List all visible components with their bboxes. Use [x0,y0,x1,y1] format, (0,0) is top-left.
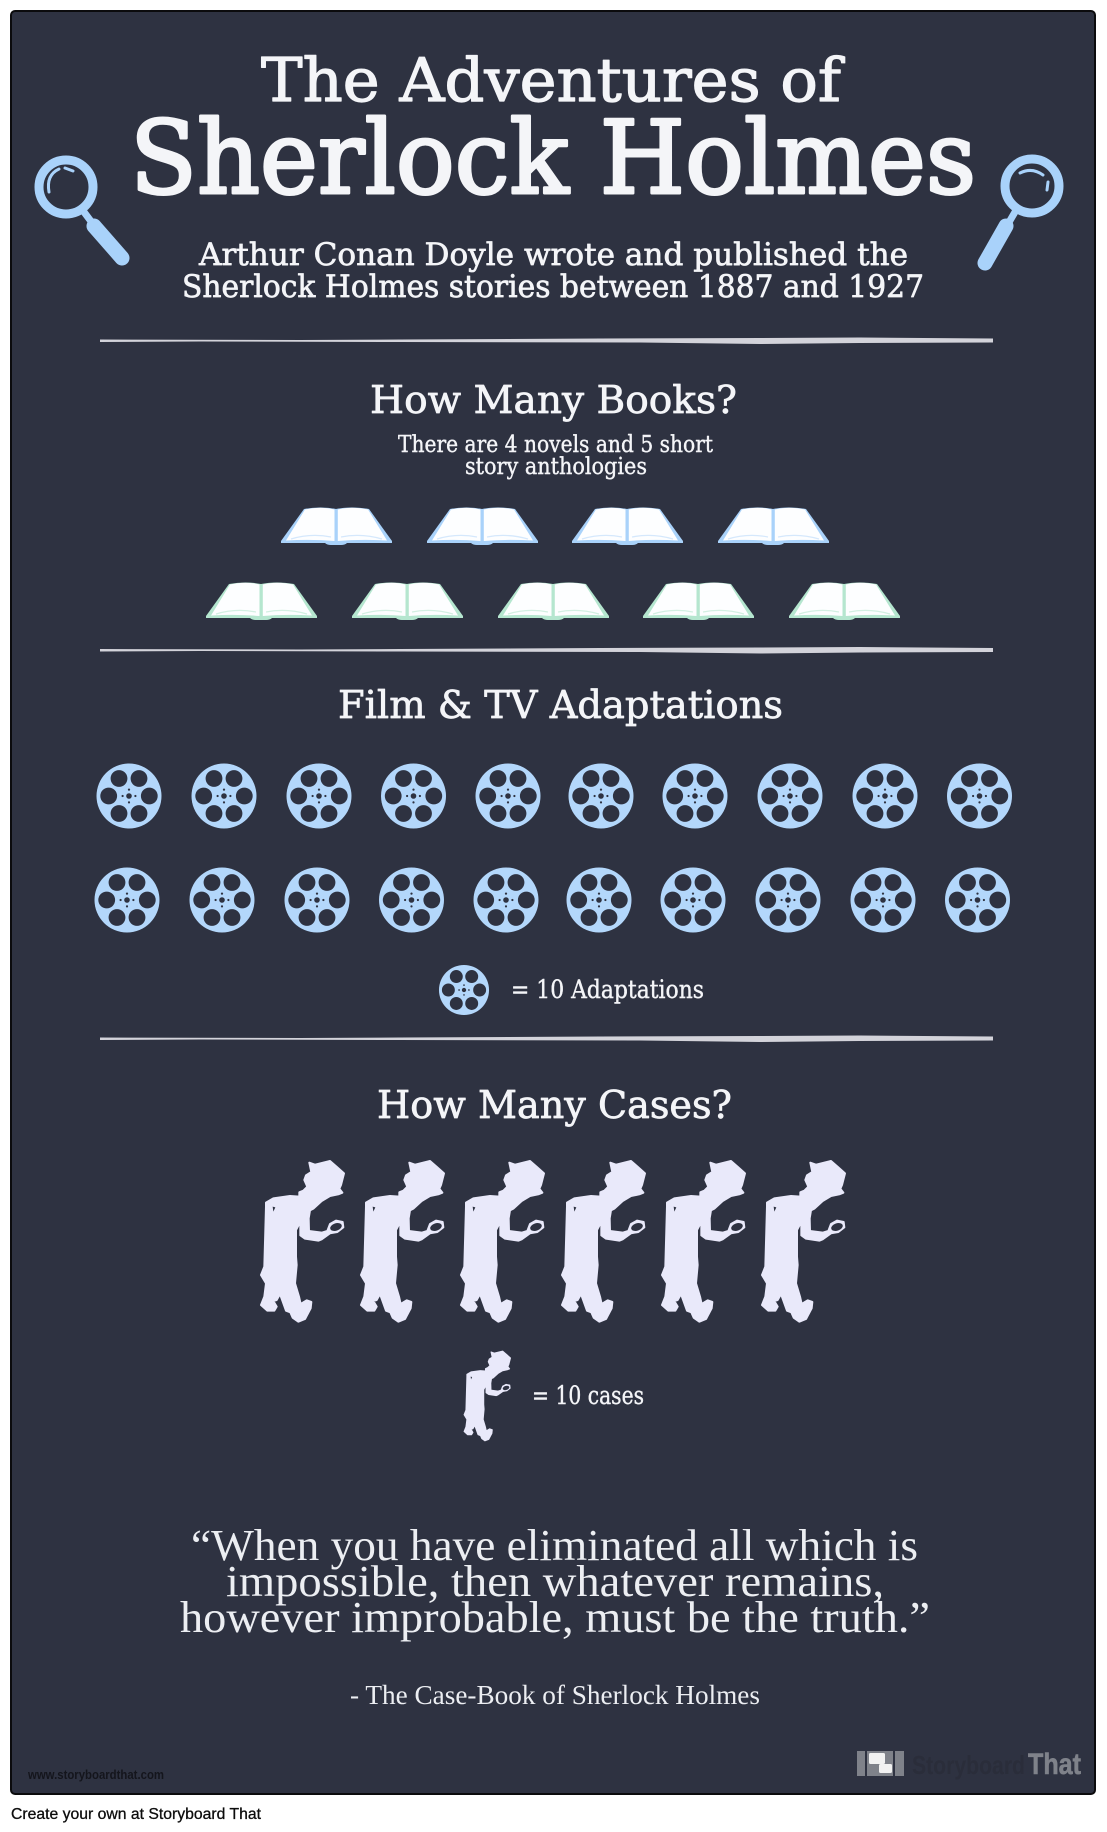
subtitle: Arthur Conan Doyle wrote and published the [198,237,908,273]
quote: “When you have eliminated all which is [191,1521,918,1570]
text: novels and anthologies [398,432,714,480]
footer: website url: www.storyboardthat.com [27,1767,164,1782]
legend: detective key: = 10 cases [532,1381,644,1410]
text: novels and anthologies: story anthologies [465,454,647,480]
title: Sherlock Holmes: Sherlock Holmes [130,99,976,217]
footer: logo [857,1748,1081,1781]
footer: logo: Storyboard [912,1750,1025,1780]
subtitle [182,237,924,305]
icons: short story anthologies row [206,582,900,620]
legend: detective key [464,1351,644,1441]
quote: however improbable, must be the truth.” [180,1593,930,1642]
legend: film reel key: = 10 Adaptations [511,975,704,1004]
icon: magnifying glass right [985,159,1059,263]
legend: film reel key [439,965,704,1015]
icons: film reels row one [96,764,1012,828]
quote [180,1521,930,1642]
icon: magnifying glass left [39,160,122,258]
heading: How Many Books?: How Many Books? [370,378,737,422]
icons: detective silhouettes [261,1161,845,1322]
footer: logo: That [1028,1748,1081,1781]
footer: credit line: Create your own at Storyboard That [11,1806,262,1823]
subtitle: Sherlock Holmes stories between 1887 and 1927 [182,269,924,305]
heading: Film & TV Adaptations: Film & TV Adaptations [338,683,783,727]
quote source: - The Case-Book of Sherlock Holmes [350,1680,760,1710]
text: novels and anthologies: There are 4 novels and 5 short [398,432,714,458]
icons: film reels row two [94,868,1010,932]
heading: How Many Cases?: How Many Cases? [377,1083,732,1127]
title: The Adventures of: The Adventures of [261,46,845,116]
icons: novels row [281,508,829,545]
quote: impossible, then whatever remains, [226,1557,884,1606]
